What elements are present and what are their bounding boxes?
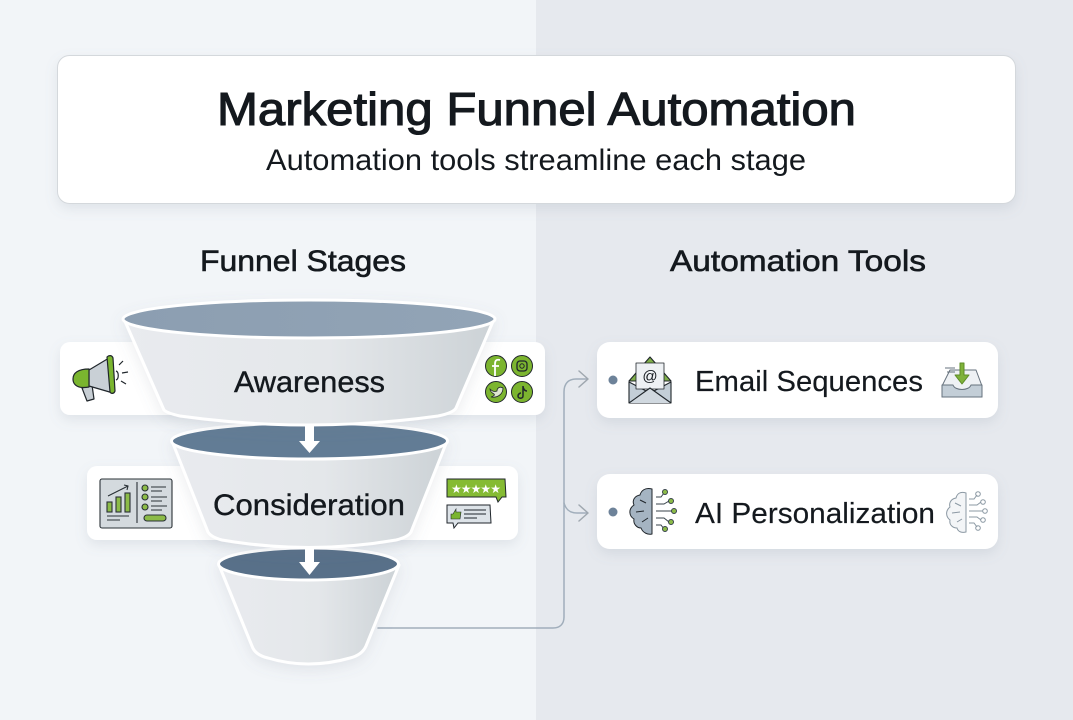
icon: analytics dashboard bbox=[100, 479, 172, 528]
icon: ai brain bbox=[630, 488, 676, 534]
tool card: email sequences bbox=[597, 342, 998, 418]
title: Marketing Funnel Automation bbox=[217, 83, 856, 135]
tool card: ai personalization bbox=[597, 474, 998, 549]
header card bbox=[58, 56, 1016, 204]
label: awareness: Awareness bbox=[234, 366, 385, 399]
heading: automation tools: Automation Tools bbox=[670, 245, 926, 278]
connector: conversion to tools bbox=[378, 371, 588, 628]
icon: review stars: ★★★★★ bbox=[451, 482, 501, 496]
arrow: consideration to conversion bbox=[299, 546, 320, 575]
panel: left background bbox=[0, 0, 536, 720]
label: ai personalization: AI Personalization bbox=[695, 498, 935, 530]
label: email sequences: Email Sequences bbox=[695, 366, 923, 398]
icon: open envelope bbox=[629, 357, 671, 403]
funnel: consideration stage bbox=[172, 423, 448, 548]
icon: faded ai brain bbox=[947, 492, 987, 532]
icon: review and comment bubbles bbox=[447, 479, 506, 528]
bullet bbox=[608, 376, 618, 384]
panel: consideration side card bbox=[87, 466, 518, 540]
icon: at sign: @ bbox=[642, 368, 658, 385]
arrow: awareness to consideration bbox=[299, 425, 320, 453]
panel: right background bbox=[536, 0, 1073, 720]
subtitle: Automation tools streamline each stage bbox=[266, 144, 806, 177]
icon: megaphone bbox=[73, 356, 128, 401]
label: consideration: Consideration bbox=[213, 489, 405, 522]
bullet bbox=[608, 508, 618, 516]
panel: awareness side card bbox=[60, 342, 545, 415]
funnel: bottom stage bbox=[218, 548, 399, 664]
heading: funnel stages: Funnel Stages bbox=[200, 245, 406, 278]
icon: social media badges bbox=[486, 356, 532, 402]
funnel: awareness stage bbox=[123, 300, 495, 425]
icon: inbox download bbox=[942, 363, 982, 397]
